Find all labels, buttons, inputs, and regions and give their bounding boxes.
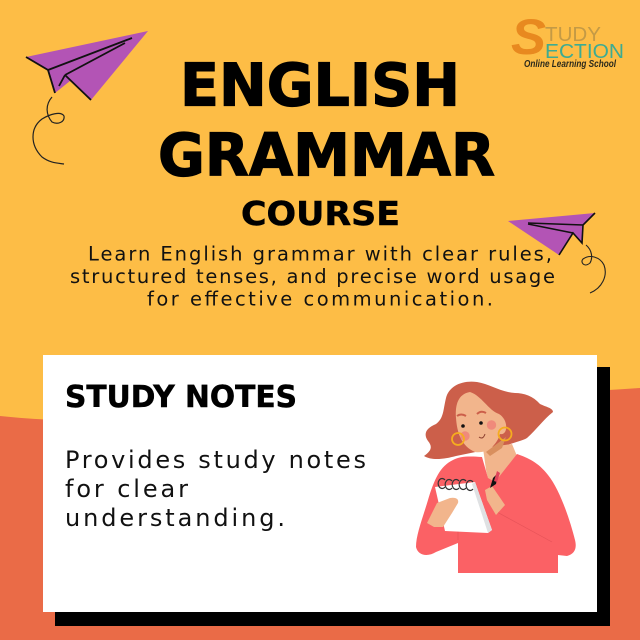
subtitle: course: COURSE <box>241 195 400 233</box>
card body text: understanding. <box>65 504 285 532</box>
title: ENGLISH <box>180 50 460 120</box>
icon: study section logo <box>511 9 624 70</box>
description text: for effective communication. <box>147 288 493 310</box>
card body text: for clear <box>65 475 188 503</box>
title: GRAMMAR <box>158 120 495 190</box>
icon: study section logo: S <box>511 9 546 65</box>
panel: study notes card <box>43 355 610 626</box>
card body text <box>65 446 366 532</box>
card body text: Provides study notes <box>65 446 366 474</box>
heading: study notes: STUDY NOTES <box>65 380 297 415</box>
orange wave background <box>0 388 640 640</box>
title <box>158 50 495 190</box>
illustration: woman taking notes <box>416 382 576 573</box>
description text: structured tenses, and precise word usage <box>70 265 555 288</box>
icon: study section logo: TUDY <box>545 24 601 46</box>
icon: paper plane right <box>508 213 605 293</box>
description text: Learn English grammar with clear rules, <box>88 242 552 266</box>
icon: study section logo: Online Learning School <box>524 59 616 70</box>
icon: paper plane top left <box>26 31 148 164</box>
description text <box>70 242 555 310</box>
icon: study section logo: ECTION <box>545 41 624 63</box>
